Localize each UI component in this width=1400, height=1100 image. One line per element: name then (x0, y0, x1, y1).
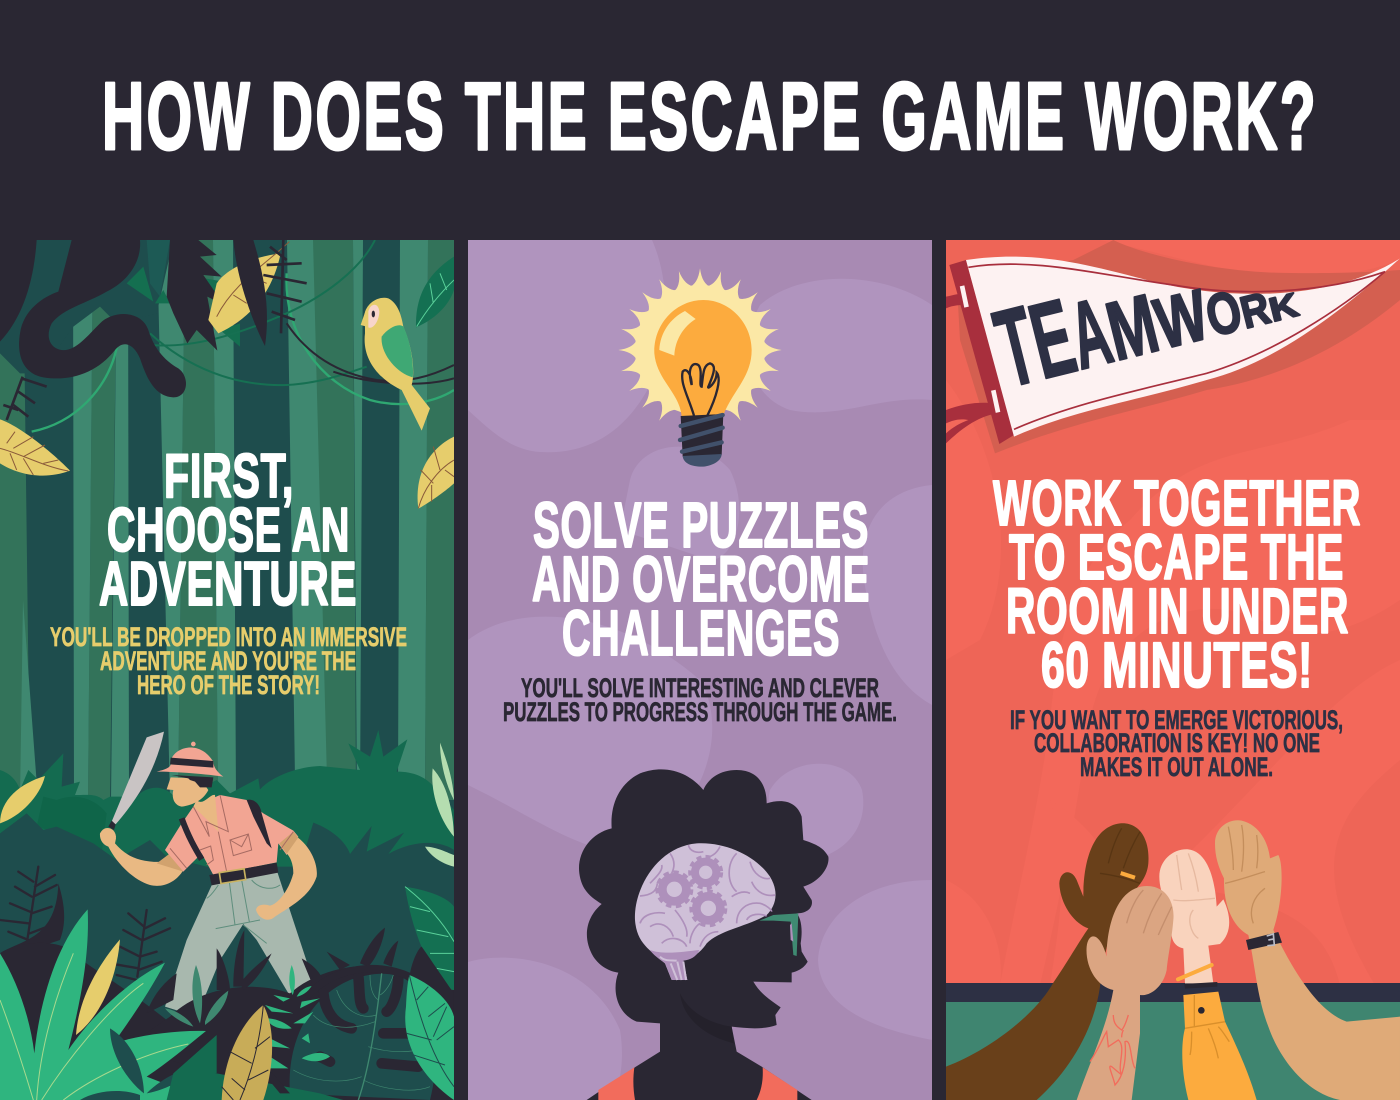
tan hand (1077, 886, 1174, 1100)
yellow leaf (0, 776, 45, 823)
heading: first, choose an adventure: ADVENTURE (99, 550, 357, 619)
pennant shadow (957, 240, 1400, 453)
forest trunks (0, 240, 454, 800)
foreground dark foliage (149, 928, 454, 1020)
strings (946, 293, 997, 443)
floor band (946, 1002, 1400, 1100)
light leaves (425, 743, 454, 867)
background waves (946, 240, 1400, 985)
dark ferns (0, 867, 170, 980)
body text: adventure: ADVENTURE AND YOU'RE THE (100, 646, 356, 676)
glasses (759, 913, 798, 956)
foreground jungle with explorer (0, 730, 454, 1100)
body text: puzzles: PUZZLES TO PROGRESS THROUGH THE GAME. (503, 697, 897, 727)
yellow leaf right (418, 437, 454, 509)
tan leaf (222, 1005, 272, 1100)
icon: light bulb (618, 268, 782, 467)
striped green fern (265, 965, 330, 1068)
beige hand (1215, 820, 1400, 1100)
parrot (361, 298, 430, 431)
heading: solve puzzles (532, 501, 868, 656)
background blobs (468, 240, 932, 1100)
dark fern (3, 240, 307, 420)
yellow sleeve (1182, 992, 1257, 1100)
dark palm leaf (167, 240, 224, 351)
bright leaves (0, 909, 207, 1100)
body text: puzzles: YOU'LL SOLVE INTERESTING AND CLEVER (521, 673, 879, 703)
body text: adventure: HERO OF THE STORY! (137, 670, 320, 700)
light hand (1159, 849, 1229, 983)
yellow leaf left (0, 419, 70, 476)
panel: solve puzzles (468, 240, 932, 1100)
pennant text: TEAMWORK (984, 219, 1306, 411)
monstera (290, 969, 436, 1100)
illustration: head with brain (579, 769, 829, 1100)
heading: first, choose an adventure (99, 452, 356, 606)
panel: choose an adventure (0, 240, 454, 1100)
green leaf right (405, 887, 454, 1000)
body text: puzzles (504, 678, 896, 722)
jungle canopy with snake (0, 240, 454, 509)
body text: teamwork: MAKES IT OUT ALONE. (1080, 752, 1273, 782)
mid foliage (37, 797, 107, 867)
gears (658, 857, 725, 925)
body text: adventure (50, 626, 407, 695)
heading: solve puzzles: AND OVERCOME (532, 543, 870, 615)
green leaf right (416, 257, 454, 327)
illustration: hands high five (946, 820, 1400, 1100)
body text: teamwork (1010, 705, 1343, 782)
bright leaf right (405, 975, 454, 1100)
heading: first, choose an adventure: FIRST, (164, 442, 294, 511)
pennant (946, 219, 1400, 453)
back bushes (0, 730, 454, 866)
yellow canopy leaf (208, 253, 281, 333)
yellow leaf small (76, 939, 120, 1035)
explorer (100, 732, 317, 1017)
body text: adventure: YOU'LL BE DROPPED INTO AN IMMERSIVE (50, 622, 407, 652)
heading: first, choose an adventure: CHOOSE AN (107, 496, 350, 565)
panel: teamwork (946, 219, 1400, 1100)
brain (635, 843, 776, 980)
heading: work together (993, 467, 1361, 701)
watch (1246, 932, 1282, 950)
heading: solve puzzles: CHALLENGES (562, 597, 840, 669)
brown hand (946, 823, 1149, 1100)
heading: solve puzzles: SOLVE PUZZLES (533, 489, 869, 561)
snake (0, 240, 186, 397)
